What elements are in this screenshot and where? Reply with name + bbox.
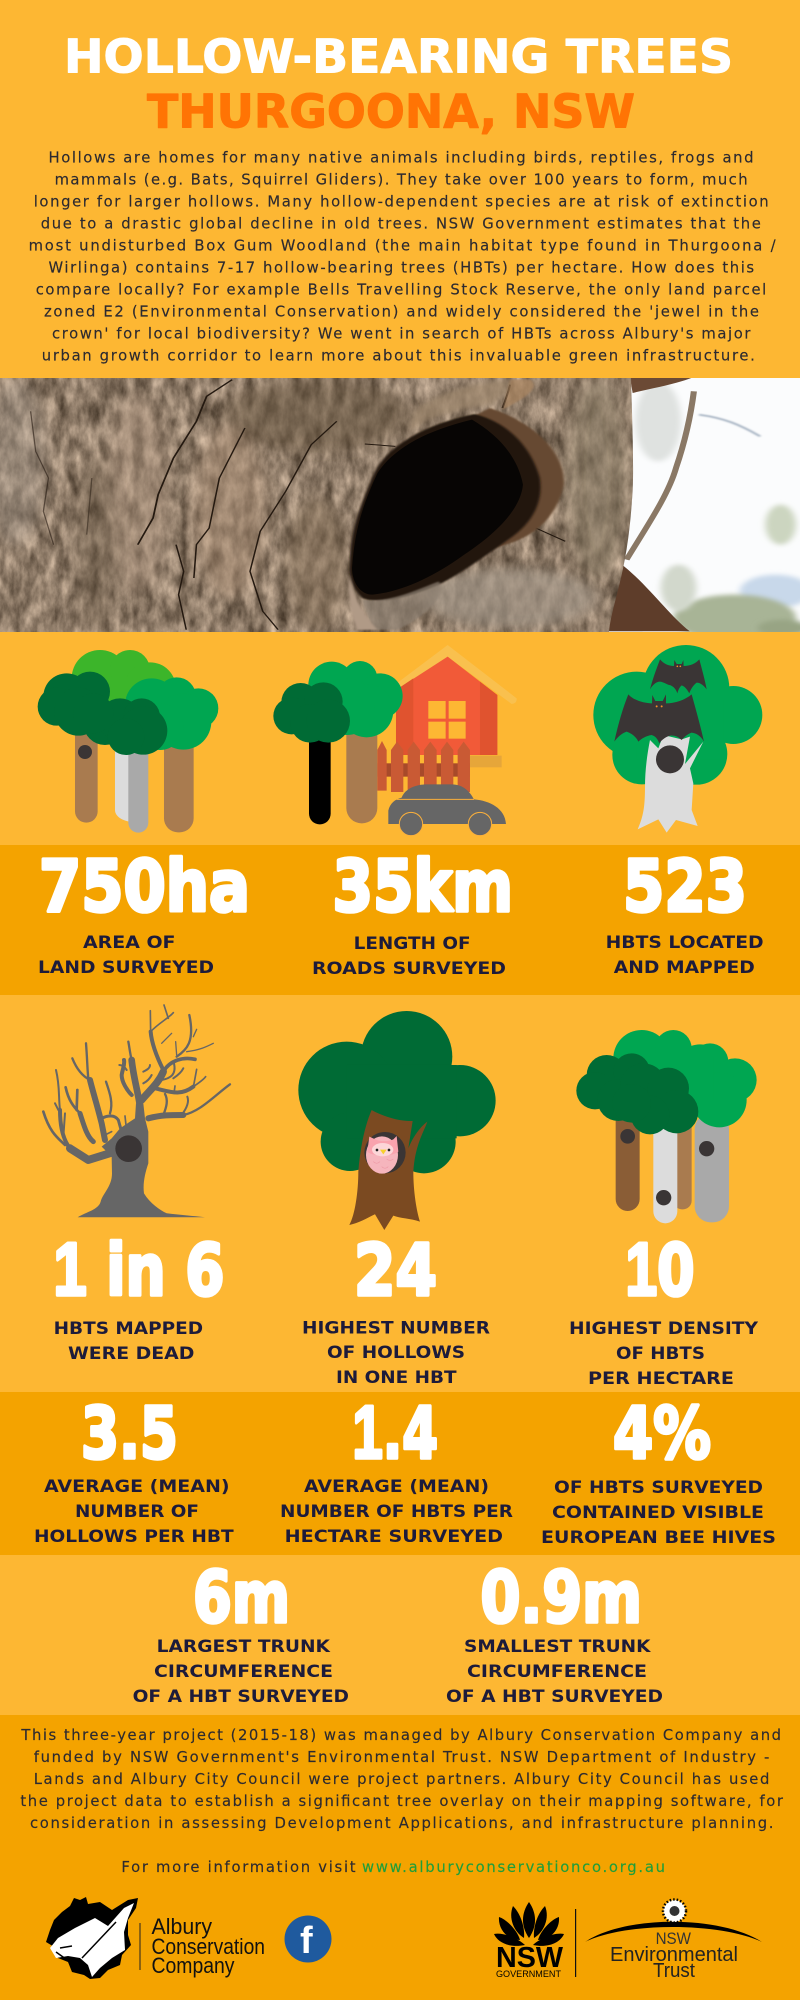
stat: 1.4: NUMBER OF HBTS PER [280, 1502, 513, 1522]
stat: 4% [541, 1392, 776, 1548]
icon: four trees with hollows [576, 1030, 757, 1223]
stat: 1.4: HECTARE SURVEYED [285, 1527, 503, 1547]
icon: bats on a tree [593, 645, 762, 833]
intro text block: crown' for local biodiversity? We went in search of HBTs across Albury's major [52, 326, 751, 343]
stat: 24: HIGHEST NUMBER [302, 1319, 490, 1339]
intro text block: compare locally? For example Bells Travelling Stock Reserve, the only land parcel [36, 282, 766, 299]
stat: 35km: ROADS SURVEYED [312, 959, 506, 979]
icon: house, car and trees [273, 645, 517, 836]
intro text block: Wirlinga) contains 7-17 hollow-bearing trees (HBTs) per hectare. How does this [48, 260, 754, 276]
stat: 1.4: AVERAGE (MEAN) [304, 1477, 489, 1497]
logo: NSW Environmental Trust [585, 1900, 762, 1982]
stat: 0.9m: SMALLEST TRUNK [464, 1637, 651, 1657]
stat: 10: 10 [626, 1227, 694, 1312]
project description: the project data to establish a significant tree overlay on their mapping software, for [20, 1793, 784, 1810]
website line: For more information visit [121, 1859, 356, 1876]
stat: 3.5: AVERAGE (MEAN) [44, 1477, 230, 1497]
stat: 523: AND MAPPED [614, 958, 755, 978]
stat: 6m [133, 1556, 349, 1707]
stat: 1 in 6: HBTS MAPPED [54, 1319, 203, 1339]
intro text block: urban growth corridor to learn more about this invaluable green infrastructure. [42, 348, 755, 365]
icon: dead tree [43, 1005, 230, 1217]
logo: NSW Environmental Trust: Trust [653, 1960, 695, 1982]
icon: sun emblem [663, 1900, 686, 1922]
stat: 3.5: HOLLOWS PER HBT [34, 1527, 234, 1547]
stat: 523: 523 [623, 845, 747, 928]
stat: 6m: OF A HBT SURVEYED [133, 1687, 349, 1707]
hollow [349, 408, 564, 630]
stat: 4%: CONTAINED VISIBLE [552, 1503, 764, 1523]
stat: 3.5: NUMBER OF [75, 1502, 199, 1522]
stat: 750ha: 750ha [39, 845, 250, 928]
stat: 750ha [38, 845, 250, 978]
stat: 35km: LENGTH OF [354, 934, 471, 954]
photo: tree hollow [0, 378, 800, 641]
intro text block: Hollows are homes for many native animals including birds, reptiles, frogs and [48, 149, 753, 166]
stat: 1 in 6: WERE DEAD [68, 1344, 194, 1364]
cracks [31, 380, 565, 630]
logo: Albury Conservation Company: Company [152, 1953, 234, 1978]
stat: 1 in 6: 1 in 6 [54, 1227, 224, 1312]
intro text block: due to a drastic global decline in old trees. NSW Government estimates that the [41, 216, 761, 232]
project description: funded by NSW Government's Environmental Trust. NSW Department of Industry - [34, 1749, 769, 1766]
logo: Albury Conservation Company: Albury [152, 1914, 212, 1939]
stat: 35km: 35km [332, 845, 513, 928]
stat: 10 [569, 1227, 759, 1389]
stat: 4%: EUROPEAN BEE HIVES [541, 1528, 776, 1548]
stat: 3.5 [34, 1392, 234, 1547]
icon: group of trees [38, 650, 218, 833]
intro text block [29, 149, 776, 365]
intro text block: zoned E2 (Environmental Conservation) and widely considered the 'jewel in the [44, 304, 759, 321]
panel: stats band one [0, 845, 800, 995]
bark trunk [0, 378, 640, 632]
intro text block: most undisturbed Box Gum Woodland (the main habitat type found in Thurgoona / [29, 238, 776, 254]
stat: 6m: CIRCUMFERENCE [154, 1662, 333, 1682]
stat: 523 [606, 845, 764, 978]
logo: NSW Government: GOVERNMENT [496, 1969, 561, 1979]
stat: 1.4: 1.4 [352, 1390, 438, 1475]
intro text block: longer for larger hollows. Many hollow-dependent species are at risk of extinction [34, 193, 769, 210]
icon: facebook: f [300, 1920, 313, 1962]
project description: This three-year project (2015-18) was managed by Albury Conservation Company and [20, 1727, 781, 1744]
stat: 24 [302, 1229, 490, 1388]
panel: stats band two [0, 1392, 800, 1555]
sky and branches behind the trunk [600, 378, 800, 641]
stat: 4%: 4% [613, 1392, 711, 1475]
stat: 0.9m [446, 1556, 663, 1707]
stat: 0.9m: CIRCUMFERENCE [467, 1662, 647, 1682]
project description: Lands and Albury City Council were project partners. Albury City Council has used [34, 1771, 769, 1788]
website line: www.alburyconservationco.org.au [362, 1859, 665, 1876]
stat: 0.9m: OF A HBT SURVEYED [446, 1687, 663, 1707]
stat: 750ha: LAND SURVEYED [38, 958, 214, 978]
icon: waratah [494, 1902, 564, 1946]
stat: 523: HBTS LOCATED [606, 933, 764, 953]
stat: 6m: LARGEST TRUNK [157, 1637, 331, 1657]
icon: tree with owl [298, 1011, 496, 1230]
stat: 10: OF HBTS [616, 1344, 705, 1364]
stat: 24: 24 [354, 1229, 437, 1312]
stat: 750ha: AREA OF [83, 933, 176, 953]
stat: 1 in 6 [54, 1227, 224, 1364]
stat: 3.5: 3.5 [81, 1392, 178, 1475]
title: THURGOONA, NSW [147, 84, 635, 138]
stat: 1.4 [280, 1390, 513, 1547]
stat: 10: HIGHEST DENSITY [569, 1319, 759, 1339]
icon: sugar glider [46, 1897, 138, 1979]
stat: 24: OF HOLLOWS [327, 1343, 465, 1363]
logo: Albury Conservation Company [46, 1897, 265, 1979]
stat: 6m: 6m [193, 1556, 290, 1639]
title [64, 30, 733, 138]
stat: 10: PER HECTARE [588, 1369, 734, 1389]
title: HOLLOW-BEARING TREES [64, 30, 733, 84]
logo: NSW Environmental Trust: Environmental [610, 1944, 738, 1966]
logo: NSW Environmental Trust: NSW [656, 1929, 691, 1948]
intro text block: mammals (e.g. Bats, Squirrel Gliders). They take over 100 years to form, much [55, 171, 748, 188]
owl [366, 1136, 398, 1174]
icon: facebook [284, 1916, 332, 1962]
logo: NSW Government [494, 1902, 564, 1979]
project description [20, 1727, 784, 1832]
project description: consideration in assessing Development Applications, and infrastructure planning. [30, 1815, 774, 1832]
website line [121, 1859, 665, 1876]
stat: 0.9m: 0.9m [480, 1556, 642, 1639]
panel: footer band [0, 1715, 800, 2000]
stat: 4%: OF HBTS SURVEYED [554, 1478, 763, 1498]
logo: Albury Conservation Company: Conservation [152, 1934, 265, 1959]
stat: 24: IN ONE HBT [336, 1368, 457, 1388]
rim highlight above hollow [410, 380, 510, 428]
logo: NSW Government: NSW [496, 1942, 564, 1974]
stat: 35km [312, 845, 513, 979]
